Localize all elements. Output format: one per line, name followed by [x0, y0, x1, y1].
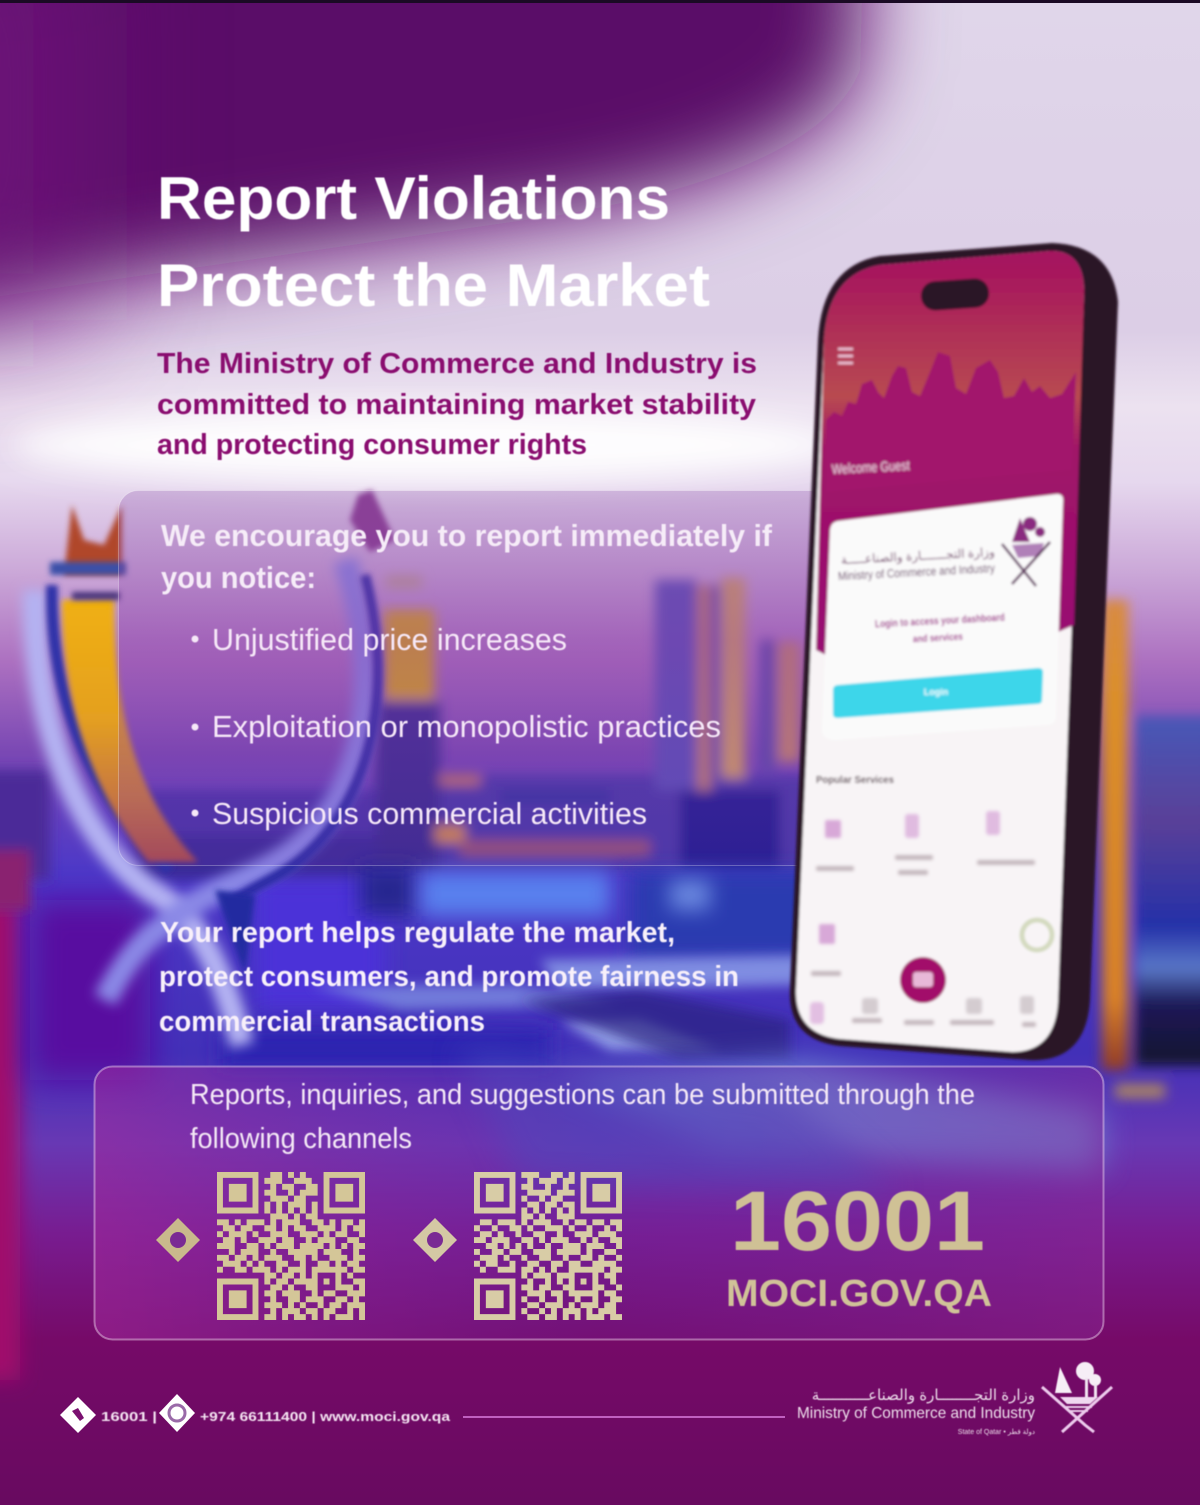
contact text: 16001 |: [101, 1409, 157, 1424]
skyline silhouette: [826, 352, 1076, 492]
report benefit text: Your report helps regulate the market,: [160, 917, 675, 949]
menu icon: [838, 349, 853, 363]
encouragement text: [161, 518, 773, 595]
intro text: [157, 348, 757, 461]
channels text: Reports, inquiries, and suggestions can be submitted through the: [190, 1079, 975, 1111]
login card: [822, 494, 1063, 740]
title: [157, 165, 710, 319]
notch: [920, 278, 990, 311]
bullet list: Exploitation or monopolistic practices: [212, 709, 721, 744]
ministry name: وزارة التجــــــــارة والصناعـــــــــــة: [812, 1387, 1035, 1404]
login button: [833, 668, 1043, 718]
footer line: [463, 1416, 785, 1418]
icon: app store diamond: [156, 1218, 200, 1262]
title: Protect the Market: [157, 252, 710, 319]
phone screen: [796, 251, 1084, 1052]
intro text: and protecting consumer rights: [157, 429, 587, 461]
icon: whatsapp diamond: [159, 1394, 195, 1432]
nav icons: [862, 996, 1034, 1014]
intro text: The Ministry of Commerce and Industry is: [157, 348, 757, 380]
ministry name: Ministry of Commerce and Industry: [797, 1405, 1035, 1422]
QR code: app store: [217, 1175, 365, 1317]
card logo: وزارة التجـــــــارة والصناعـــــة: [841, 545, 995, 568]
panel: channels: [94, 1066, 1104, 1340]
ministry logo: [797, 1362, 1112, 1436]
icon: play store diamond: [413, 1218, 457, 1262]
phone body: [790, 243, 1118, 1060]
chat badge: [1022, 920, 1052, 950]
phone mockup: [790, 243, 1118, 1060]
emblem: [1042, 1362, 1112, 1432]
popular services heading: Popular Services: [816, 774, 894, 786]
water and reflections: [220, 866, 1100, 1190]
hotline number: 16001: [730, 1174, 985, 1268]
ministry name: State of Qatar • دولة قطر: [958, 1429, 1035, 1436]
report benefit text: protect consumers, and promote fairness in: [159, 961, 739, 993]
channels text: following channels: [190, 1123, 412, 1155]
QR code: play store: [474, 1175, 622, 1317]
contact text: +974 66111400 | www.moci.gov.qa: [200, 1409, 451, 1424]
card logo: Ministry of Commerce and Industry: [838, 561, 995, 583]
bullet list: [192, 622, 721, 831]
bullet list: Suspicious commercial activities: [212, 796, 647, 831]
report benefit text: commercial transactions: [159, 1006, 485, 1038]
encouragement text: We encourage you to report immediately if: [161, 518, 773, 553]
website: MOCI.GOV.QA: [726, 1273, 992, 1315]
service icons: [810, 811, 1000, 1024]
encouragement text: you notice:: [161, 560, 316, 595]
app header: [816, 251, 1084, 658]
service labels: [811, 855, 1036, 1027]
card logo: [838, 517, 1050, 586]
login prompt: Login to access your dashboard: [875, 612, 1005, 630]
phone mockup: Login: [924, 687, 948, 697]
report benefit text: [159, 917, 739, 1038]
background: blurred Doha skyline: [0, 490, 1200, 1190]
contact text: [101, 1409, 451, 1424]
bullet list: Unjustified price increases: [212, 622, 567, 657]
icon: phone diamond: [60, 1397, 96, 1433]
phone mockup: and services: [913, 632, 963, 645]
welcome text: Welcome Guest: [831, 457, 910, 477]
channels text: [190, 1079, 975, 1155]
crescent tower: [35, 490, 395, 1045]
panel: report checklist: [118, 490, 838, 866]
intro text: committed to maintaining market stability: [157, 389, 756, 421]
floating action button: [900, 957, 946, 1003]
title: Report Violations: [157, 165, 670, 232]
footer contact: [60, 1394, 451, 1433]
ministry name: [797, 1387, 1035, 1436]
